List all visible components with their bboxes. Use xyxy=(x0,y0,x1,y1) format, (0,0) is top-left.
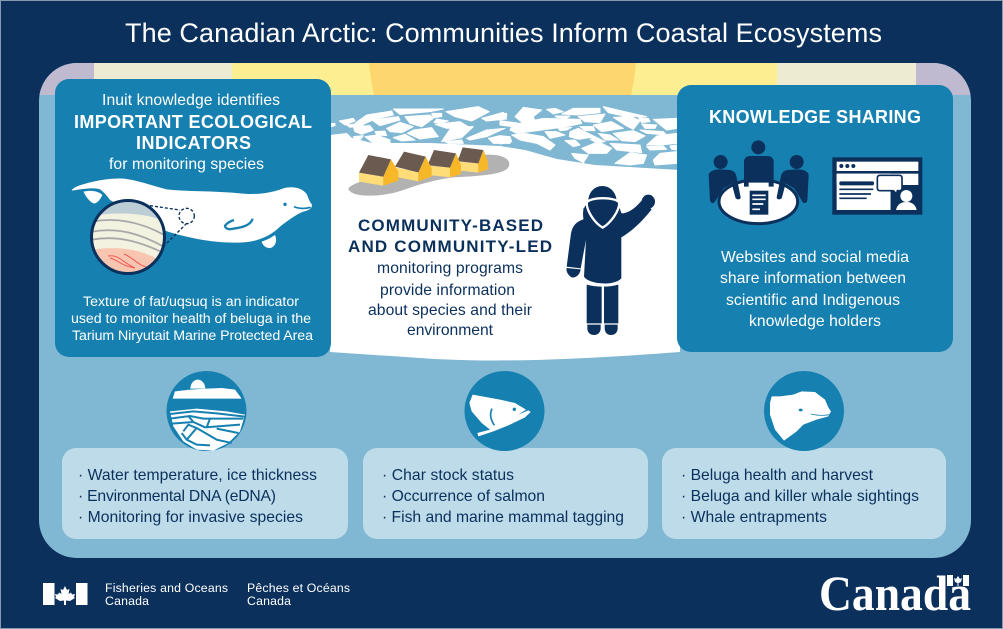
text block: community-based monitoring: provide information xyxy=(380,282,515,299)
icon: beluga whale xyxy=(72,178,312,248)
icon: beluga head xyxy=(764,371,844,451)
department name French: Canada xyxy=(247,594,291,608)
icon: people at a table xyxy=(709,140,809,224)
description: share information between xyxy=(720,270,906,287)
panel heading: IMPORTANT ECOLOGICAL xyxy=(74,112,312,132)
text block: community-based monitoring: about species and their xyxy=(368,302,532,319)
description: scientific and Indigenous xyxy=(726,292,900,309)
sub-heading: for monitoring species xyxy=(109,156,264,173)
text block: community-based monitoring: COMMUNITY-BASED xyxy=(358,216,543,235)
panel heading: INDICATORS xyxy=(136,133,251,153)
panel: fish indicators xyxy=(363,448,648,539)
description: used to monitor health of beluga in the xyxy=(71,311,311,327)
icon: person waving in parka xyxy=(567,186,655,335)
department name French xyxy=(247,581,350,608)
department name French: Pêches et Océans xyxy=(247,581,350,595)
panel: knowledge sharing xyxy=(677,85,953,352)
description xyxy=(71,294,313,344)
description: Tarium Niryutait Marine Protected Area xyxy=(72,328,313,344)
panel: beluga indicators: · Whale entrapments xyxy=(681,509,827,526)
text block: community-based monitoring: AND COMMUNITY-LED xyxy=(348,237,552,256)
panel: beluga indicators: · Beluga health and harvest xyxy=(681,467,874,484)
icon: fish head xyxy=(464,371,544,451)
panel: fish indicators: · Char stock status xyxy=(382,467,514,484)
Canada wordmark: Canada xyxy=(819,565,971,621)
panel heading: KNOWLEDGE SHARING xyxy=(709,107,921,127)
department name English xyxy=(105,581,228,608)
icon: website with chat xyxy=(832,157,922,215)
panel: ice and water indicators xyxy=(62,448,348,539)
department name English: Fisheries and Oceans xyxy=(105,581,228,595)
panel heading xyxy=(74,112,312,153)
panel: ice and water indicators: · Water temperature, ice thickness xyxy=(78,467,317,484)
icon: magnified fat texture xyxy=(90,200,166,276)
text block: community-based monitoring: monitoring programs xyxy=(377,260,523,277)
panel: important ecological indicators xyxy=(55,79,331,357)
panel: beluga indicators xyxy=(662,448,946,539)
department name English: Canada xyxy=(105,594,149,608)
intro line: Inuit knowledge identifies xyxy=(102,92,280,109)
panel: ice and water indicators: · Monitoring for invasive species xyxy=(78,509,303,526)
description: Texture of fat/uqsuq is an indicator xyxy=(83,294,299,310)
text block: community-based monitoring xyxy=(348,216,552,339)
panel: fish indicators: · Fish and marine mammal tagging xyxy=(382,509,624,526)
panel: beluga indicators: · Beluga and killer whale sightings xyxy=(681,488,919,505)
icon: sun and sea ice xyxy=(166,371,246,451)
text block: community-based monitoring: environment xyxy=(407,322,494,339)
background scene: sky, sun, water, ice xyxy=(39,63,971,558)
title: The Canadian Arctic: Communities Inform Coastal Ecosystems xyxy=(125,18,882,48)
panel: fish indicators: · Occurrence of salmon xyxy=(382,488,545,505)
panel: ice and water indicators: · Environmental DNA (eDNA) xyxy=(78,488,276,505)
description xyxy=(720,249,909,330)
description: Websites and social media xyxy=(721,249,909,266)
icon: Canadian flag signature xyxy=(43,583,88,605)
description: knowledge holders xyxy=(749,313,881,330)
icon: village houses xyxy=(348,147,509,196)
